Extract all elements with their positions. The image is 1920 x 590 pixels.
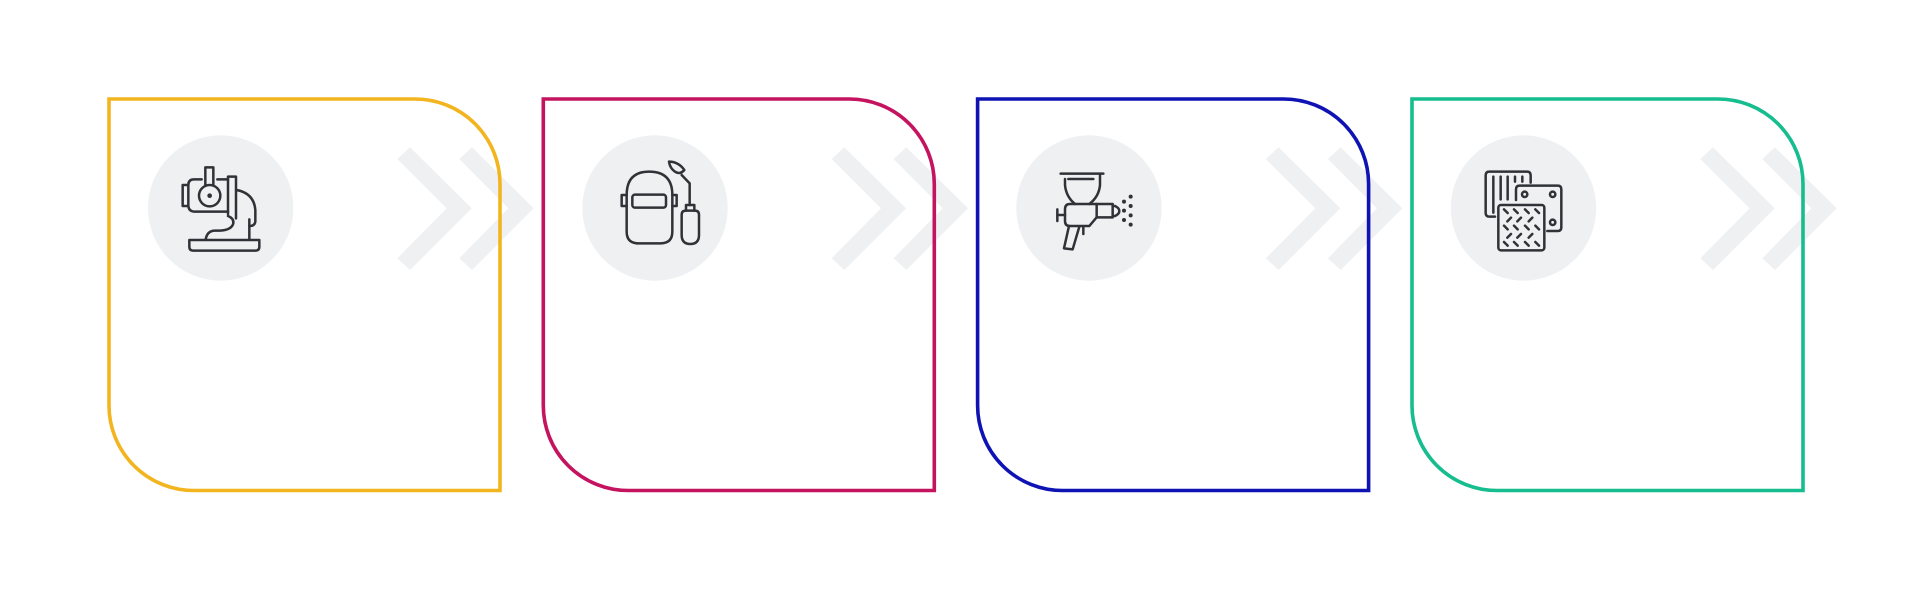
- icon: spray gun: [1057, 174, 1133, 249]
- chevrons 2: [832, 147, 968, 270]
- icon circle 4: [1451, 135, 1596, 281]
- panel 4 outline: [1412, 99, 1803, 490]
- icon circle 3: [1016, 135, 1162, 281]
- step 4: [1412, 99, 1837, 490]
- step 1: [109, 99, 534, 490]
- chevrons 1: [397, 147, 534, 270]
- icon: welding mask and torch: [622, 162, 699, 244]
- icon: material samples: [1486, 172, 1561, 250]
- step 3: [978, 99, 1402, 490]
- icon circle 2: [582, 135, 728, 281]
- panel 3 outline: [978, 99, 1369, 490]
- step 2: [543, 99, 968, 490]
- icon: microscope: [183, 167, 259, 251]
- panel 2 outline: [543, 99, 934, 490]
- icon circle 1: [148, 135, 293, 281]
- panel 1 outline: [109, 99, 500, 490]
- chevrons 4: [1700, 147, 1837, 270]
- chevrons 3: [1266, 147, 1402, 270]
